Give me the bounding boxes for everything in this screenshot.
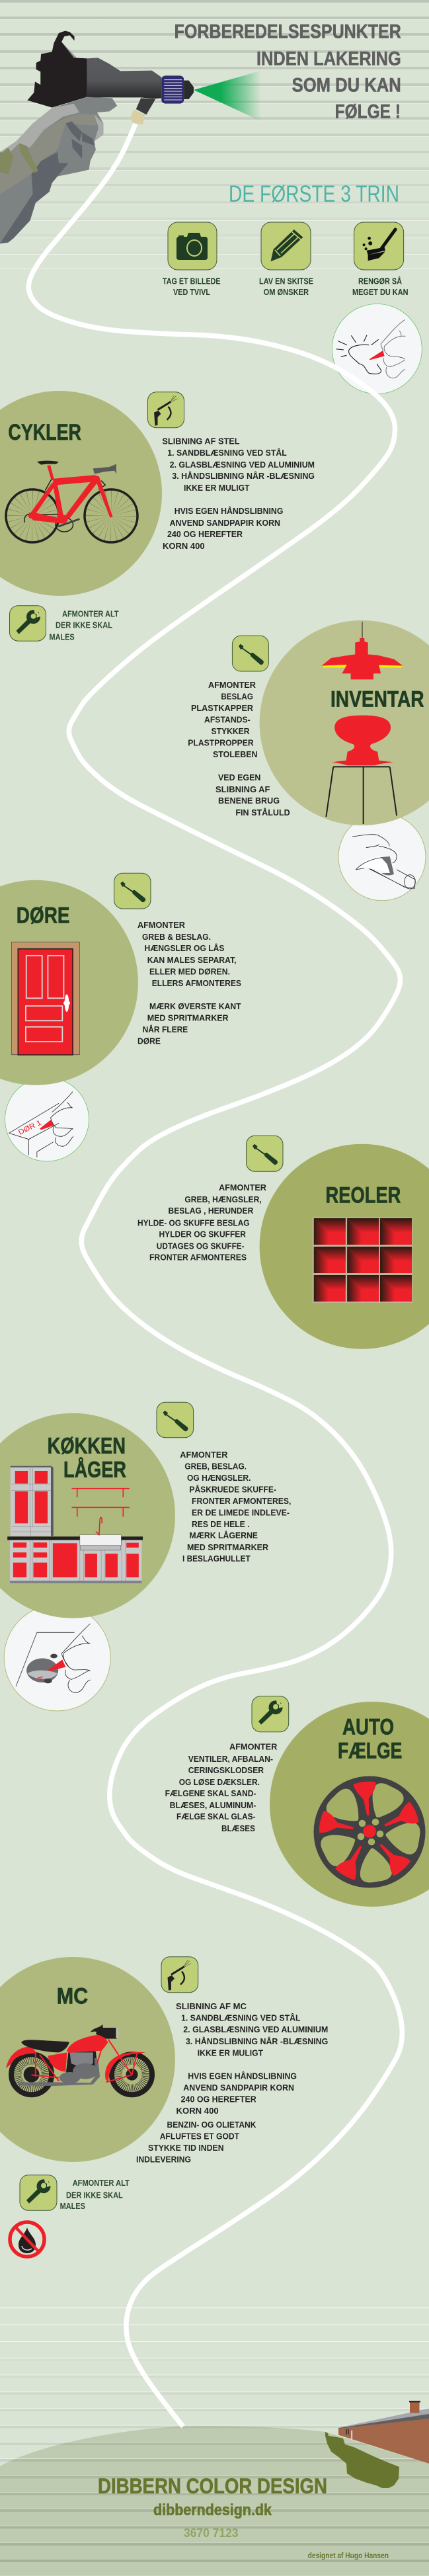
text: slibning af mc: 240 OG HEREFTER [181, 2094, 256, 2104]
title [175, 21, 401, 122]
step label: clean: MEGET DU KAN [352, 287, 409, 297]
text: slibning af mc: 1. SANDBLÆSNING VED STÅL [181, 2013, 301, 2023]
text: afmonter beslag: PLASTPROPPER [188, 737, 254, 747]
title: INDEN LAKERING [256, 48, 401, 69]
tree [325, 2432, 399, 2488]
arm [0, 97, 117, 243]
panel: døre [0, 880, 138, 1085]
kitchen illustration [7, 1466, 143, 1583]
text: slibning af stel: SLIBNING AF STEL [162, 436, 240, 446]
icon: brush [354, 222, 404, 270]
chair [326, 716, 397, 824]
text: afmonter beslag: AFSTANDS- [204, 714, 251, 724]
text: afmonter køkken: RES DE HELE . [192, 1519, 250, 1529]
icon: wrench [9, 606, 46, 641]
motorcycle illustration [6, 2024, 152, 2095]
icon: screwdriver [114, 873, 151, 909]
text: afmonter ventiler: VENTILER, AFBALAN- [188, 1754, 273, 1764]
text: afmonter alt: AFMONTER ALT [62, 608, 119, 618]
text: afmonter greb: ELLER MED DØREN. [149, 966, 230, 976]
heading: reoler: REOLER [325, 1183, 401, 1208]
text: afmonter hylder: HYLDER OG SKUFFER [159, 1229, 247, 1239]
hill at the bottom [0, 2426, 429, 2576]
phone number: 3670 7123 [184, 2526, 238, 2540]
heading: døre: DØRE [17, 903, 69, 929]
text: afmonter greb: NÅR FLERE [143, 1024, 188, 1034]
text: afmonter hylder: BESLAG , HERUNDER [168, 1206, 254, 1216]
text: slibning af mc: AFLUFTES ET GODT [160, 2131, 239, 2141]
spray hose [28, 124, 402, 2427]
text: slibning af mc: BENZIN- OG OLIETANK [167, 2120, 256, 2130]
building on the horizon [338, 2401, 429, 2464]
text: afmonter hylder: HYLDE- OG SKUFFE BESLAG [137, 1218, 250, 1227]
step label: make a sketch: OM ØNSKER [264, 287, 309, 297]
text: afmonter beslag: STYKKER [212, 726, 250, 736]
company name: DIBBERN COLOR DESIGN [98, 2474, 327, 2498]
icon: camera [168, 222, 217, 270]
text: slibning af stel: ANVEND SANDPAPIR KORN [170, 518, 280, 528]
text: afmonter beslag: PLASTKAPPER [191, 703, 254, 713]
text: afmonter køkken: I BESLAGHULLET [182, 1554, 251, 1563]
text: afmonter greb [137, 920, 241, 1046]
text: slibning af mc: SLIBNING AF MC [176, 2001, 247, 2011]
text: afmonter køkken: PÅSKRUEDE SKUFFE- [189, 1484, 276, 1494]
icon: pencil [261, 222, 311, 270]
icon: wrench [20, 2175, 57, 2210]
panel: køkkenlåger [0, 1413, 175, 1618]
text: afmonter alt: DER IKKE SKAL [56, 620, 112, 630]
marker text: DØR 1 [17, 1119, 43, 1137]
title: SOM DU KAN [292, 74, 401, 96]
text: afmonter ventiler: FÆLGENE SKAL SAND- [165, 1788, 256, 1798]
text: afmonter greb: AFMONTER [137, 920, 186, 930]
illustration: marking hinge hole [4, 1604, 110, 1711]
icon: screwdriver [232, 636, 268, 671]
text: afmonter hylder: GREB, HÆNGSLER, [184, 1194, 262, 1204]
bicycle illustration [6, 461, 137, 542]
text: slibning af mc: IKKE ER MULIGT [198, 2048, 263, 2057]
text: afmonter køkken: FRONTER AFMONTERES, [192, 1496, 291, 1506]
text: afmonter alt (mc): MALES [60, 2201, 85, 2211]
step label: take a picture: VED TVIVL [173, 287, 210, 297]
title: FØLGE ! [335, 101, 401, 122]
text: afmonter køkken [180, 1450, 291, 1563]
icon: spray gun [148, 392, 184, 428]
text: afmonter ventiler: FÆLGE SKAL GLAS- [176, 1811, 256, 1821]
text: afmonter ventiler [165, 1742, 278, 1833]
text: slibning af mc: 2. GLASBLÆSNING VED ALUMINIUM [183, 2024, 328, 2034]
text: afmonter ventiler: BLÆSES, ALUMINUM- [170, 1800, 256, 1810]
lamp [321, 622, 403, 679]
text: afmonter greb: ELLERS AFMONTERES [152, 978, 241, 988]
text: slibning af stel: 240 OG HEREFTER [167, 529, 243, 539]
heading: auto fælge: AUTO [342, 1715, 394, 1740]
icon: screwdriver [157, 1402, 194, 1438]
icon: screwdriver [246, 1136, 283, 1171]
step label: make a sketch: LAV EN SKITSE [259, 276, 313, 286]
text: slibning af mc [136, 2001, 328, 2164]
text: slibning af mc: HVIS EGEN HÅNDSLIBNING [188, 2071, 297, 2081]
text: afmonter alt: MALES [49, 632, 75, 642]
text: slibning af stel: 2. GLASBLÆSNING VED ALUMINIUM [170, 460, 315, 470]
text: afmonter ventiler: BLÆSES [221, 1823, 255, 1833]
spray gun and arm illustration [0, 31, 261, 243]
heading: mc: MC [57, 1983, 88, 2009]
heading: køkken låger: KØKKEN [48, 1433, 126, 1458]
text: afmonter greb: MÆRK ØVERSTE KANT [149, 1001, 241, 1011]
panel: autofælge [270, 1702, 429, 1907]
heading: auto fælge: FÆLGE [338, 1738, 402, 1763]
text: afmonter alt [49, 608, 119, 642]
text: afmonter køkken: AFMONTER [180, 1450, 228, 1460]
text: slibning af mc: ANVEND SANDPAPIR KORN [183, 2083, 294, 2093]
text: afmonter beslag: FIN STÅLULD [235, 808, 290, 817]
text: afmonter hylder: FRONTER AFMONTERES [149, 1252, 247, 1262]
text: afmonter beslag: BESLAG [221, 691, 253, 701]
step label: make a sketch [259, 276, 313, 297]
text: afmonter beslag: BENENE BRUG [218, 796, 280, 806]
text: afmonter beslag: STOLEBEN [213, 749, 258, 759]
text: afmonter alt (mc) [60, 2178, 130, 2211]
illustration: hand rubbing chair leg [338, 813, 426, 901]
text: afmonter greb: HÆNGSLER OG LÅS [144, 943, 225, 953]
step label: take a picture: TAG ET BILLEDE [163, 276, 221, 286]
text: afmonter greb: GREB & BESLAG. [142, 932, 211, 942]
hose connector [136, 98, 155, 114]
text: afmonter hylder: UDTAGES OG SKUFFE- [157, 1241, 245, 1251]
panel: inventar [260, 620, 429, 825]
step label: take a picture [163, 276, 221, 297]
text: afmonter greb: KAN MALES SEPARAT, [147, 955, 237, 965]
text: afmonter køkken: MED SPRITMARKER [187, 1542, 269, 1552]
wheel rim illustration [313, 1776, 426, 1888]
illustration: hand marking door edge [5, 1077, 89, 1161]
text: afmonter hylder: AFMONTER [219, 1183, 267, 1192]
text: afmonter ventiler: AFMONTER [229, 1742, 278, 1752]
text: afmonter beslag: AFMONTER [208, 680, 256, 690]
text: afmonter alt (mc): AFMONTER ALT [73, 2178, 130, 2188]
text: slibning af stel: KORN 400 [163, 541, 205, 551]
text: slibning af stel: 1. SANDBLÆSNING VED STÅL [167, 448, 287, 458]
text: afmonter beslag: VED EGEN [218, 772, 260, 782]
text: afmonter beslag [188, 680, 290, 817]
heading: køkken låger [48, 1433, 126, 1482]
text: afmonter beslag: SLIBNING AF [215, 784, 270, 794]
designer credit: designet af Hugo Hansen [308, 2551, 389, 2560]
text: slibning af mc: INDLEVERING [136, 2154, 191, 2164]
website: dibberndesign.dk [153, 2501, 272, 2519]
door illustration [11, 942, 79, 1055]
heading: cykler: CYKLER [8, 420, 81, 445]
panel: mc [0, 1957, 175, 2162]
text: afmonter køkken: MÆRK LÅGERNE [189, 1530, 258, 1540]
green spray [194, 71, 261, 121]
icon: spray gun [161, 1957, 198, 1993]
text: slibning af stel: IKKE ER MULIGT [184, 483, 250, 493]
text: afmonter greb: MED SPRITMARKER [147, 1013, 229, 1022]
text: afmonter greb: DØRE [137, 1036, 161, 1046]
text: slibning af stel: HVIS EGEN HÅNDSLIBNING [175, 506, 283, 516]
gun hook and body [61, 42, 77, 58]
text: slibning af stel [162, 436, 315, 551]
heading: køkken låger: LÅGER [63, 1457, 126, 1482]
illustration: hand drawing with marker [332, 304, 422, 394]
text: slibning af mc: STYKKE TID INDEN [148, 2143, 224, 2153]
icon: no oil sign [10, 2222, 44, 2257]
panel: cykler [0, 391, 162, 596]
step label: clean [352, 276, 409, 297]
text: slibning af stel: 3. HÅNDSLIBNING NÅR -BLÆSNING [172, 471, 315, 481]
text: afmonter ventiler: CERINGSKLODSER [188, 1765, 264, 1775]
text: afmonter alt (mc): DER IKKE SKAL [66, 2190, 123, 2200]
text: afmonter ventiler: OG LØSE DÆKSLER. [179, 1777, 260, 1787]
marker text: A [36, 1675, 45, 1682]
text: afmonter køkken: ER DE LIMEDE INDLEVE- [192, 1507, 290, 1517]
step label: clean: RENGØR SÅ [358, 276, 403, 286]
text: afmonter køkken: OG HÆNGSLER. [187, 1473, 251, 1483]
panel: reoler [260, 1144, 429, 1349]
text: slibning af mc: KORN 400 [176, 2106, 219, 2116]
nozzle cap [161, 75, 194, 104]
text: afmonter hylder [137, 1183, 267, 1262]
text: afmonter køkken: GREB, BESLAG. [184, 1461, 247, 1471]
icon: wrench [252, 1696, 289, 1732]
text: slibning af mc: 3. HÅNDSLIBNING NÅR -BLÆSNING [186, 2036, 328, 2046]
heading: auto fælge [338, 1715, 402, 1763]
shelf illustration [313, 1218, 412, 1303]
